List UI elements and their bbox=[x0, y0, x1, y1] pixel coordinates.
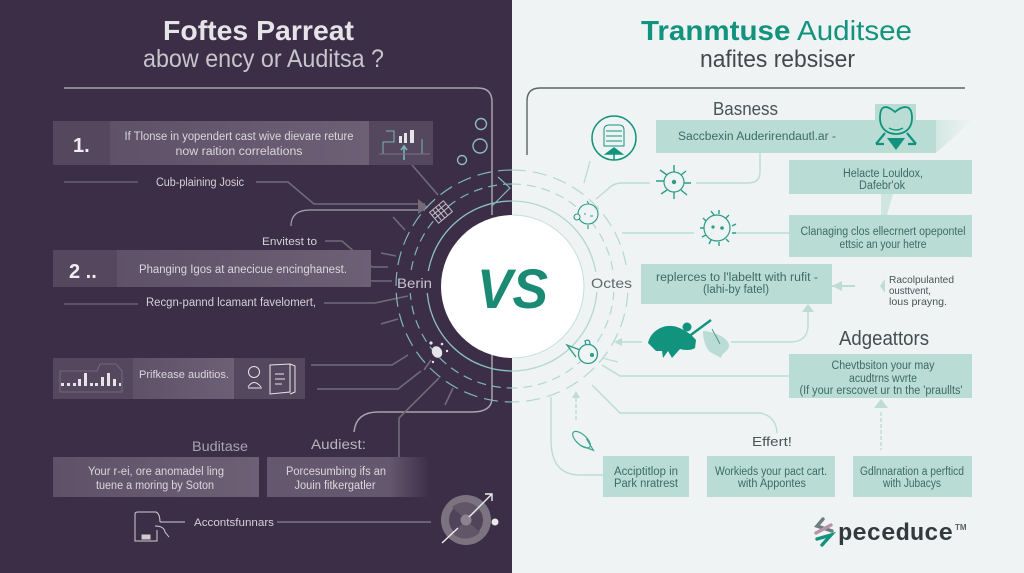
label: Envitest to: Envitest to bbox=[262, 236, 317, 248]
VS text: VS bbox=[477, 257, 548, 320]
panel: Chevtbsiton box: (If your erscovet ur tn the 'praullts' bbox=[800, 385, 962, 397]
panel: Clanaging box bbox=[789, 215, 972, 257]
panel: Helacte box bbox=[789, 160, 972, 194]
icon cell 3 bbox=[234, 358, 305, 399]
label: Recgn-pannd: Recgn-pannd lcamant favelomert, bbox=[146, 297, 316, 309]
panel: Saccbexin box bbox=[656, 120, 973, 153]
icon: person and document bbox=[248, 364, 295, 394]
panel: replieces box bbox=[641, 264, 832, 304]
label: Berin: Berin bbox=[397, 275, 432, 291]
right title: Tranmtuse Auditsee bbox=[641, 15, 912, 46]
panel: Gdlnnaration box: Gdlnnaration a perfticd bbox=[860, 466, 964, 478]
subheading: Audiest: Audiest: bbox=[311, 437, 366, 452]
icon: hatched tag on ring bbox=[430, 201, 452, 223]
panel: point 3 bbox=[53, 358, 305, 399]
label: Accontsfunnars: Accontsfunnars bbox=[194, 517, 275, 529]
left title: Foftes Parreat bbox=[163, 15, 354, 46]
panel: bottom middle box: Porcesumbing ifs an bbox=[286, 466, 386, 478]
point 1 text: now raition correlations bbox=[176, 146, 303, 158]
panel: Acciptitlop box: Park nratrest bbox=[614, 478, 679, 490]
label: Effert: Effert! bbox=[752, 434, 792, 449]
subheading: Buditase: Buditase bbox=[192, 439, 248, 454]
label: Cub-plaining Josic: Cub-plaining Josic bbox=[156, 177, 244, 189]
point 3 text: Prifkease auditios. bbox=[139, 369, 229, 381]
icon: green creature with pointer bbox=[648, 320, 729, 358]
panel: bottom middle box bbox=[267, 457, 430, 497]
panel: bottom left box: tuene a moring by Soton bbox=[96, 480, 214, 492]
text cell 1 bbox=[110, 121, 369, 165]
text cell 2 bbox=[117, 250, 371, 287]
right subtitle: nafites rebsiser bbox=[700, 46, 855, 73]
panel: Chevtbsiton box: acudtrns wvrte bbox=[849, 373, 917, 385]
arrow up to Chevtbsiton box bbox=[874, 399, 888, 408]
text cell 3 bbox=[133, 358, 234, 399]
point 1 text: If Tlonse in yopendert cast wive dievare reture bbox=[124, 131, 354, 143]
left connector lines bbox=[64, 165, 453, 457]
logo bbox=[816, 519, 967, 548]
panel: point 2 bbox=[53, 250, 371, 287]
label: Octes: Octes bbox=[591, 275, 632, 291]
panel: Chevtbsiton box: Chevtbsiton your may bbox=[832, 360, 935, 372]
icon: mini bar chart bbox=[60, 364, 122, 392]
right heading bbox=[641, 15, 912, 73]
icon: sun face middle bbox=[700, 210, 736, 246]
panel: bottom left box: Your r-ei, ore anomadel ling bbox=[88, 466, 224, 478]
icon: face on ring top right bbox=[574, 201, 598, 229]
central rings right bbox=[512, 170, 628, 402]
icon: dial with arrow bbox=[441, 494, 498, 545]
panel: Workieds box: with Appontes bbox=[737, 478, 806, 490]
panel: Gdlnnaration box: with Jubacys bbox=[882, 478, 941, 490]
panel: Acciptitlop box: Acciptitlop in bbox=[614, 466, 678, 478]
icon: document in circle bbox=[592, 116, 636, 160]
left frame line bbox=[64, 88, 492, 432]
icon: white glyph on ring bbox=[429, 341, 448, 363]
panel: Clanaging box: Clanaging clos ellecrnert opepontel bbox=[800, 226, 966, 238]
left heading bbox=[143, 15, 384, 73]
left subtitle: abow ency or Auditsa ? bbox=[143, 45, 384, 73]
panel: point 1 bbox=[53, 121, 433, 165]
panel: Workieds box: Workieds your pact cart. bbox=[715, 466, 827, 478]
panel: Clanaging box: ettsic an your hetre bbox=[840, 239, 926, 251]
arrowheads on right connectors bbox=[572, 304, 814, 398]
panel: Gdlnnaration box bbox=[853, 456, 972, 497]
panel: bottom middle box: Jouin fitkergatler bbox=[294, 480, 376, 492]
small circle icons top left of ring bbox=[458, 118, 487, 164]
panel: bottom left box bbox=[53, 457, 259, 497]
icon: mascot bbox=[875, 104, 916, 150]
panel: Workieds box bbox=[707, 456, 835, 497]
arrow to dial bbox=[277, 521, 431, 523]
central VS circle bbox=[441, 215, 584, 358]
trademark: TM bbox=[955, 523, 967, 532]
right connector lines bbox=[551, 153, 881, 475]
panel: left dark background bbox=[0, 0, 512, 573]
chevron on left ring bbox=[492, 177, 510, 206]
text: Racolpulanted: ousttvent, bbox=[889, 285, 931, 297]
panel: Helacte box: Dafebr'ok bbox=[859, 180, 905, 192]
icon: device with hand bbox=[135, 512, 185, 541]
central rings left bbox=[396, 170, 512, 402]
faded band between boxes bbox=[881, 194, 893, 215]
panel: Saccbexin box: Saccbexin Auderirendautl.ar - bbox=[678, 131, 836, 143]
panel: Chevtbsiton box bbox=[789, 354, 972, 398]
text: Racolpulanted: Racolpulanted bbox=[889, 274, 954, 286]
number cell 2 bbox=[53, 250, 117, 287]
label: Basness: Basness bbox=[713, 99, 778, 119]
number cell 1 bbox=[53, 121, 110, 165]
text: Racolpulanted: lous prayng. bbox=[889, 296, 947, 308]
arrow into replieces box bbox=[832, 279, 885, 293]
panel: right light background bbox=[512, 0, 1024, 573]
panel: Helacte box: Helacte Louldox, bbox=[843, 168, 923, 180]
icon: sun virus top bbox=[656, 165, 691, 199]
number 2: 2 .. bbox=[69, 261, 97, 283]
panel: Acciptitlop box bbox=[603, 456, 689, 497]
number 1: 1. bbox=[73, 135, 90, 157]
icon: bar chart with arrow bbox=[379, 130, 430, 160]
panel: replieces box: (lahi-by fatel) bbox=[703, 284, 769, 296]
label: Berin bbox=[397, 271, 432, 293]
icon cell 1 bbox=[369, 121, 433, 165]
icon: logo mark bbox=[816, 519, 832, 545]
point 2 text: Phanging Igos at anecicue encinghanest. bbox=[139, 264, 347, 276]
chart cell bbox=[53, 358, 133, 399]
label: Adgeattors: Adgeattors bbox=[839, 328, 929, 350]
arrowheads into tag bbox=[418, 199, 428, 214]
wordmark: peceduce bbox=[838, 521, 953, 548]
icon: leaf capsule bbox=[570, 429, 597, 454]
icon: bunny face on ring bbox=[567, 340, 598, 364]
right frame line bbox=[527, 88, 965, 155]
panel: replieces box: replerces to l'labeltt with rufit - bbox=[656, 272, 818, 284]
